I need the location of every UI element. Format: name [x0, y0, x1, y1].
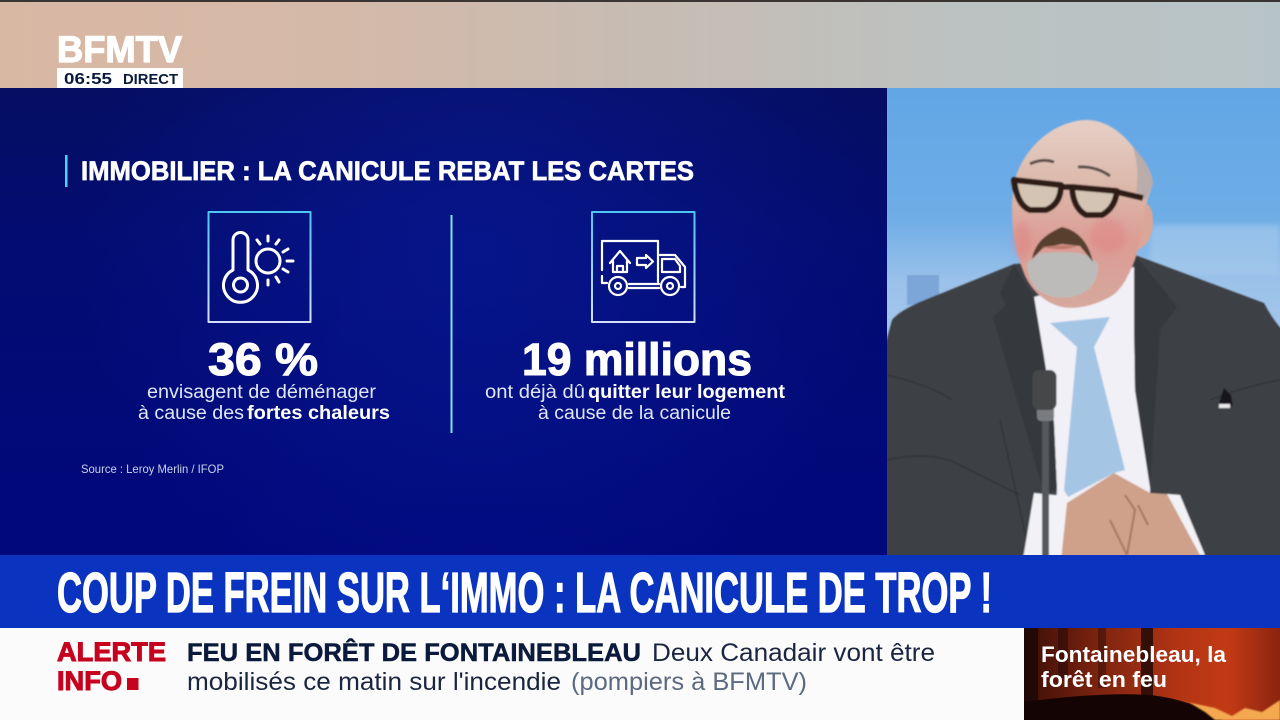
glasses — [1014, 180, 1143, 215]
alert label: INFO — [57, 666, 122, 696]
alert text — [187, 637, 935, 696]
forest floor — [1024, 694, 1222, 720]
caption: à cause de la canicule — [538, 403, 731, 424]
jacket folds — [888, 375, 1279, 536]
caption: fortes chaleurs — [247, 403, 390, 424]
thumbnail caption — [1041, 646, 1226, 687]
tree trunks — [1024, 628, 1153, 702]
thumbnail: forest fire — [1024, 628, 1280, 720]
right cuff — [1167, 494, 1205, 555]
BFMTV logo with clock — [57, 29, 183, 88]
suit jacket — [878, 255, 1280, 570]
alert text: (pompiers à BFMTV) — [571, 668, 807, 696]
clasped hands — [1060, 472, 1201, 555]
thumbnail caption: Fontainebleau, la — [1041, 642, 1227, 667]
stat: 19 millions — [485, 212, 786, 424]
hair at temple — [1133, 147, 1153, 200]
microphone — [1032, 370, 1056, 570]
shirt cuff — [1022, 492, 1058, 555]
caption — [138, 382, 390, 424]
source note: Source : Leroy Merlin / IFOP — [81, 462, 224, 476]
alert text: Deux Canadair vont être — [652, 639, 935, 667]
studio background — [887, 88, 1280, 342]
panel: studio guest — [878, 88, 1280, 570]
mouth — [1042, 245, 1078, 249]
eyebrows — [1030, 160, 1110, 176]
panel: infographic — [0, 88, 887, 555]
clock and direct tag: 06:55 — [64, 71, 112, 88]
caption: ont déjà dû — [485, 382, 585, 403]
caption: envisagent de déménager — [147, 382, 377, 403]
goatee — [1027, 252, 1098, 298]
alert text: FEU EN FORÊT DE FONTAINEBLEAU — [187, 637, 641, 667]
heading: IMMOBILIER : LA CANICULE REBAT LES CARTES — [81, 156, 694, 186]
top backdrop band — [0, 0, 1280, 88]
figure: 36 % — [208, 334, 318, 385]
thumbnail caption: forêt en feu — [1041, 667, 1167, 692]
alert label: ALERTE — [57, 637, 166, 667]
logo wordmark: BFMTV — [57, 29, 182, 70]
tie — [1050, 317, 1125, 497]
right lapel — [1134, 328, 1150, 486]
caption: quitter leur logement — [588, 382, 786, 403]
caption — [485, 382, 786, 424]
clock and direct tag: DIRECT — [123, 71, 178, 88]
alert label — [57, 637, 166, 696]
flames — [1168, 698, 1280, 720]
ticker: alerte info — [0, 628, 1024, 720]
ear — [1138, 203, 1154, 250]
alert text: mobilisés ce matin sur l'incendie — [187, 668, 561, 696]
head — [1012, 120, 1153, 308]
stat: 36 % — [138, 212, 390, 424]
pocket square — [1218, 388, 1233, 406]
guest illustration — [878, 120, 1280, 570]
left lapel — [1032, 297, 1057, 488]
icon: thermometer and sun — [208, 212, 310, 322]
clock and direct tag — [57, 68, 183, 88]
moustache — [1032, 227, 1093, 262]
vertical divider — [450, 215, 452, 433]
shirt — [1033, 266, 1152, 500]
figure: 19 millions — [522, 334, 752, 385]
caption: à cause des — [138, 403, 244, 424]
cheeks — [1013, 218, 1126, 258]
icon: moving truck — [592, 212, 694, 322]
